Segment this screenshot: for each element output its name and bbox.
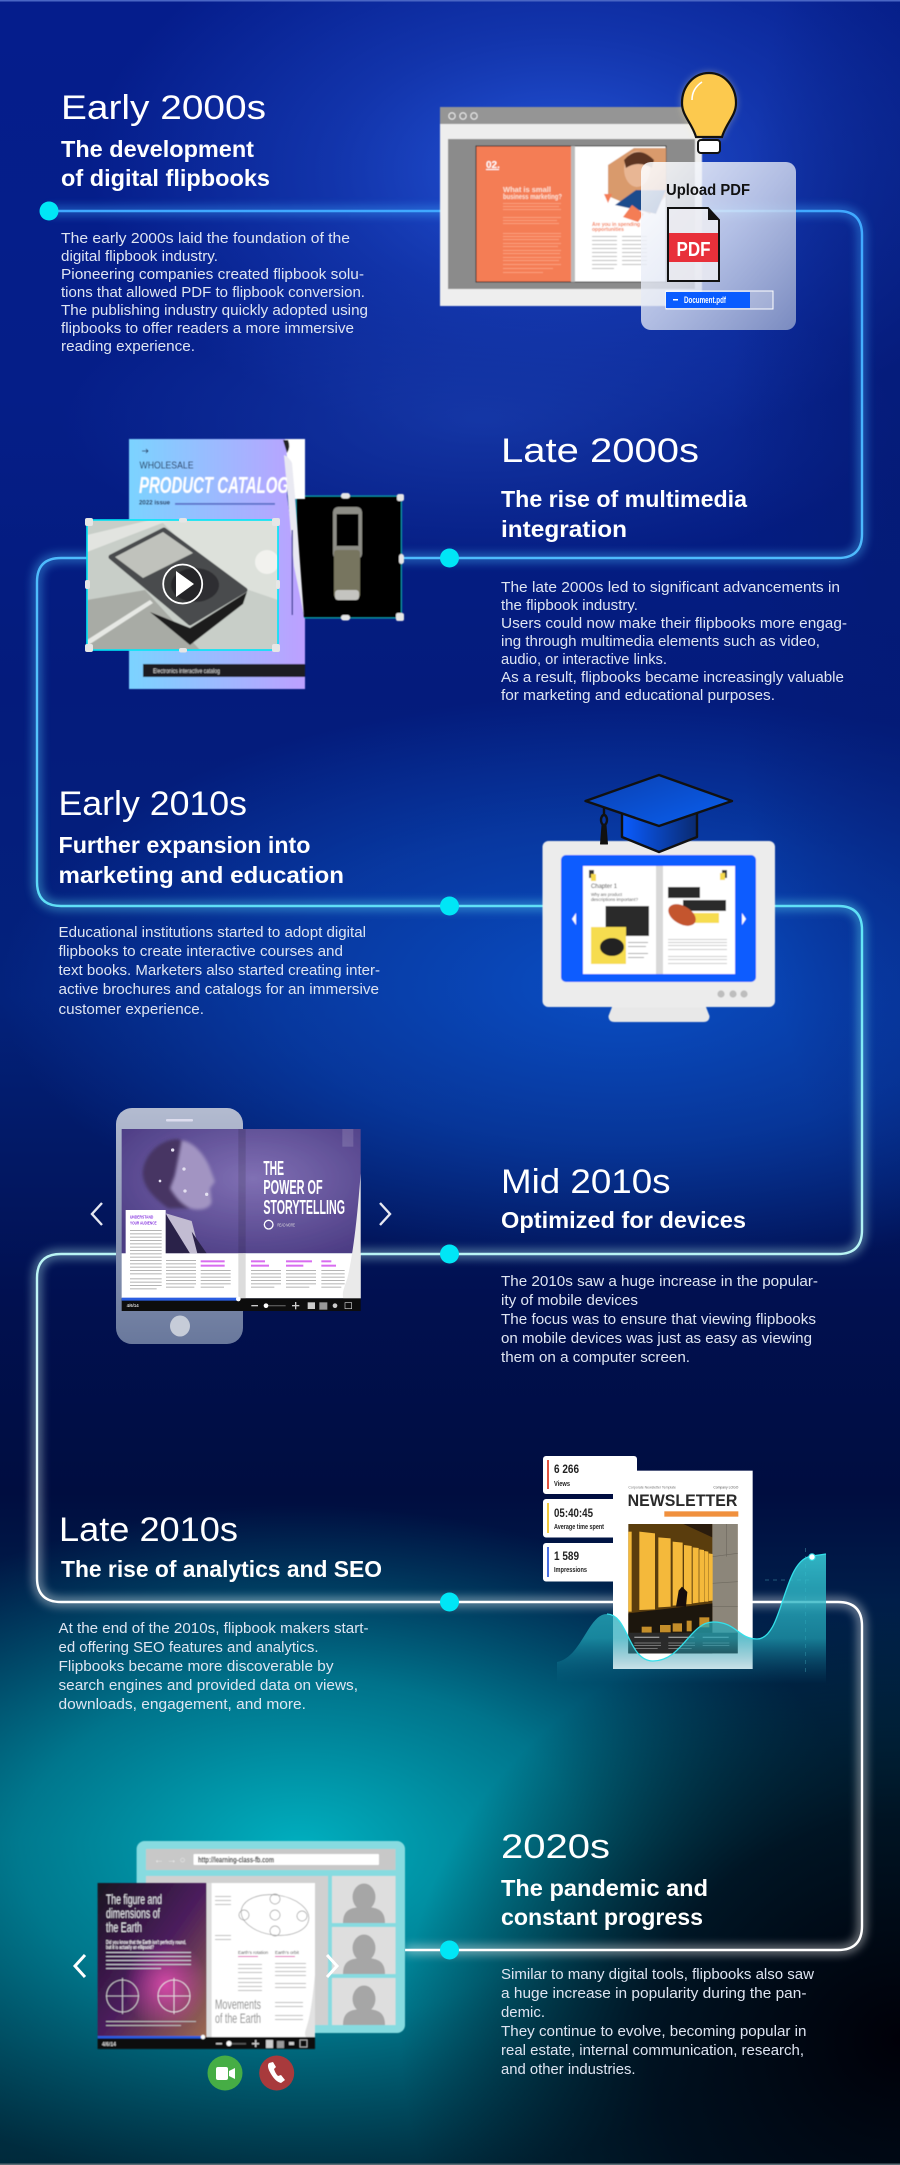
heading: Late 2010s: Late 2010s <box>59 1511 238 1549</box>
body text: The late 2000s led to significant advancements in <box>501 580 840 596</box>
flipbook toolbar <box>122 1297 361 1311</box>
stat card: average time spent: Average time spent <box>554 1522 604 1531</box>
body text: As a result, flipbooks became increasingly valuable <box>501 670 844 686</box>
body text <box>58 1621 369 1713</box>
stat card: impressions <box>543 1543 637 1582</box>
subheading: rise of multimedia integration: The rise of multimedia <box>501 486 747 512</box>
heading: Early 2010s: Early 2010s <box>58 785 247 823</box>
left page heading: dimensions of <box>106 1905 160 1921</box>
body text: The 2010s saw a huge increase in the popular- <box>501 1274 818 1290</box>
body text: the flipbook industry. <box>501 598 638 614</box>
section: Early 2010s <box>58 775 775 1022</box>
body text <box>501 1967 815 2078</box>
upload progress bar <box>666 291 773 309</box>
stat card: impressions: 1 589 <box>554 1549 579 1563</box>
illustration: video call browser: http://learning-class-fb.com <box>198 1856 274 1864</box>
body text: customer experience. <box>58 1002 204 1018</box>
body text: At the end of the 2010s, flipbook makers start- <box>58 1621 369 1637</box>
illustration: browser with flipbook: What is small <box>503 185 551 194</box>
illustration: Earth flipbook: but it is actually an ellipsoid? <box>106 1945 154 1951</box>
illustration: product catalog page: Electronics interactive catalog <box>153 669 220 675</box>
stat card: average time spent: 05:40:45 <box>554 1506 593 1520</box>
body text: reading experience. <box>61 339 195 355</box>
illustration: newsletter cover: Company LOGO <box>713 1485 738 1490</box>
illustration: browser with flipbook: business marketing? <box>503 192 562 201</box>
orbit diagram <box>239 1890 311 1940</box>
icon: graduation cap <box>586 775 732 852</box>
timeline dot <box>440 1592 459 1612</box>
body text: They continue to evolve, becoming popular in <box>501 2024 806 2040</box>
upload progress bar: Document.pdf <box>684 295 727 305</box>
man portrait <box>143 1139 215 1253</box>
icon: left arrow <box>92 1203 102 1225</box>
button: video call <box>208 2056 242 2090</box>
body text: on mobile devices was just as easy as viewing <box>501 1331 812 1347</box>
illustration: newsletter cover: NEWSLETTER <box>628 1492 738 1510</box>
illustration: product catalog page: PRODUCT CATALOG <box>139 472 289 498</box>
illustration: newsletter cover <box>613 1471 753 1669</box>
book title text: STORYTELLING <box>263 1197 345 1219</box>
body text <box>501 1274 818 1366</box>
flipbook toolbar <box>98 2035 315 2049</box>
illustration: video frame with play button <box>85 518 280 652</box>
body text: The early 2000s laid the foundation of the <box>61 231 350 247</box>
subheading: pandemic and constant progress: The pandemic and <box>501 1875 708 1901</box>
body text: Flipbooks became more discoverable by <box>58 1659 334 1675</box>
body text <box>501 580 847 704</box>
timeline dot <box>440 1940 459 1960</box>
icon: right arrow <box>380 1203 390 1225</box>
body text: audio, or interactive links. <box>501 652 667 668</box>
body text: a huge increase in popularity during the pan- <box>501 1986 807 2002</box>
illustration: Earth flipbook: Earth's orbit <box>275 1950 300 1955</box>
icon: play button <box>163 564 202 604</box>
illustration: video call browser <box>137 1841 405 2033</box>
body text: search engines and provided data on views, <box>58 1678 358 1694</box>
timeline dot <box>440 548 459 568</box>
heading: 2020s: 2020s <box>501 1828 610 1866</box>
heading: Late 2000s: Late 2000s <box>501 432 699 470</box>
chart: teal engagement wave <box>557 1548 826 1684</box>
subheading: rise of multimedia integration: integration <box>501 516 627 542</box>
right page heading <box>215 1996 261 2026</box>
book title text: THE <box>263 1158 284 1180</box>
icon: PDF file: PDF <box>676 239 710 261</box>
right page heading: Movements <box>215 1996 261 2012</box>
body text: text books. Marketers also started creating inter- <box>58 963 380 979</box>
subheading: further expansion: marketing and education <box>58 862 344 888</box>
subheading: analytics and SEO: The rise of analytics and SEO <box>61 1556 382 1582</box>
icon: left arrow <box>75 1955 85 1977</box>
section: Mid 2010s <box>92 1108 818 1366</box>
illustration: browser with flipbook <box>440 107 702 306</box>
body text: ed offering SEO features and analytics. <box>58 1640 318 1656</box>
timeline dot <box>440 896 459 916</box>
right page heading: of the Earth <box>215 2010 261 2026</box>
illustration: product catalog page <box>129 439 305 689</box>
body text: demic. <box>501 2005 545 2021</box>
flipbook toolbar: 4/6/14 <box>127 1303 139 1308</box>
panel: upload PDF <box>641 162 796 330</box>
book title text <box>263 1158 345 1219</box>
illustration: phone with flipbook: YOUR AUDIENCE <box>130 1220 157 1226</box>
book title text: POWER OF <box>263 1177 323 1199</box>
illustration: monitor with flipbook: Why are product <box>591 892 623 897</box>
flipbook toolbar: 4/6/14 <box>102 2042 116 2048</box>
subheading: development of digital flipbooks <box>61 136 270 191</box>
subheading: optimized for devices: Optimized for devices <box>501 1207 746 1233</box>
section: Early 2000s <box>40 73 796 355</box>
left page heading <box>106 1891 162 1935</box>
body text: tions that allowed PDF to flipbook conversion. <box>61 285 365 301</box>
body text: digital flipbook industry. <box>61 249 218 265</box>
body text <box>61 231 368 355</box>
body text: downloads, engagement, and more. <box>58 1697 306 1713</box>
left page heading: the Earth <box>106 1919 142 1935</box>
illustration: video call browser: ← → ○ <box>154 1855 186 1866</box>
body text: and other industries. <box>501 2062 636 2078</box>
icon: PDF file <box>668 208 719 281</box>
body text: flipbooks to offer readers a more immersive <box>61 321 354 337</box>
illustration: product catalog page: WHOLESALE <box>140 460 194 472</box>
left page heading: The figure and <box>106 1891 162 1907</box>
stat card: views: Views <box>554 1479 570 1488</box>
icon: right arrow <box>327 1955 337 1977</box>
icon: light bulb <box>682 73 736 153</box>
timeline dot <box>40 202 58 220</box>
illustration: newsletter cover: Corporate Newsletter Template <box>628 1485 677 1490</box>
subheading: development of digital flipbooks: of digital flipbooks <box>61 165 270 191</box>
section: 2020s <box>75 1828 815 2090</box>
timeline connector line <box>37 211 862 1950</box>
illustration: monitor with flipbook: Chapter 1 <box>591 884 618 890</box>
body text: Users could now make their flipbooks more engag- <box>501 616 847 632</box>
subheading: pandemic and constant progress: constant progress <box>501 1904 703 1930</box>
body text: real estate, internal communication, research, <box>501 2043 804 2059</box>
illustration: browser with flipbook: 02. <box>486 160 500 171</box>
body text: active brochures and catalogs for an immersive <box>58 982 379 998</box>
body text: for marketing and educational purposes. <box>501 688 775 704</box>
body text: them on a computer screen. <box>501 1350 690 1366</box>
stat card: average time spent <box>543 1499 637 1538</box>
newsletter photo <box>628 1524 738 1653</box>
stat card: views <box>543 1456 637 1494</box>
body text: Similar to many digital tools, flipbooks also saw <box>501 1967 815 1983</box>
illustration: Earth flipbook: Did you know that the Earth isn't perfectly round, <box>106 1940 186 1946</box>
subheading: development of digital flipbooks: The development <box>61 136 254 162</box>
illustration: phone with flipbook: READ MORE <box>277 1222 295 1227</box>
body text: Educational institutions started to adopt digital <box>58 925 366 941</box>
button: phone call <box>259 2056 294 2090</box>
illustration: flip phone image <box>296 493 404 621</box>
illustration: browser with flipbook: opportunities <box>592 227 624 233</box>
illustration: phone with flipbook: UNDERSTAND <box>130 1215 154 1221</box>
stat card: impressions: Impressions <box>554 1565 587 1574</box>
subheading: pandemic and constant progress <box>501 1875 708 1930</box>
illustration: product catalog page: 2022 issue <box>139 500 170 506</box>
subheading: further expansion: Further expansion into <box>58 832 310 858</box>
stat card: views: 6 266 <box>554 1462 579 1476</box>
illustration: Earth flipbook <box>98 1883 315 2049</box>
illustration: phone with flipbook <box>116 1108 361 1344</box>
subheading: further expansion <box>58 832 344 888</box>
section: Late 2000s <box>85 432 847 704</box>
illustration: Earth flipbook: Earth's rotation <box>238 1950 269 1955</box>
subheading: rise of multimedia integration <box>501 486 747 542</box>
timeline dot <box>440 1244 459 1264</box>
body text: ity of mobile devices <box>501 1293 638 1309</box>
body text <box>58 925 380 1018</box>
section: Late 2010s <box>58 1456 826 1713</box>
heading: Mid 2010s: Mid 2010s <box>501 1163 670 1201</box>
participant tiles <box>332 1876 396 2025</box>
label: upload PDF: Upload PDF <box>666 182 750 199</box>
body text: The publishing industry quickly adopted using <box>61 303 368 319</box>
body text: The focus was to ensure that viewing flipbooks <box>501 1312 816 1328</box>
illustration: monitor with flipbook <box>542 841 775 1022</box>
body text: flipbooks to create interactive courses and <box>58 944 343 960</box>
illustration: browser with flipbook: Are you in spending <box>592 222 640 228</box>
body text: ing through multimedia elements such as video, <box>501 634 820 650</box>
heading: Early 2000s: Early 2000s <box>61 89 266 127</box>
illustration: monitor with flipbook: descriptions important? <box>591 897 638 902</box>
body text: Pioneering companies created flipbook solu- <box>61 267 364 283</box>
